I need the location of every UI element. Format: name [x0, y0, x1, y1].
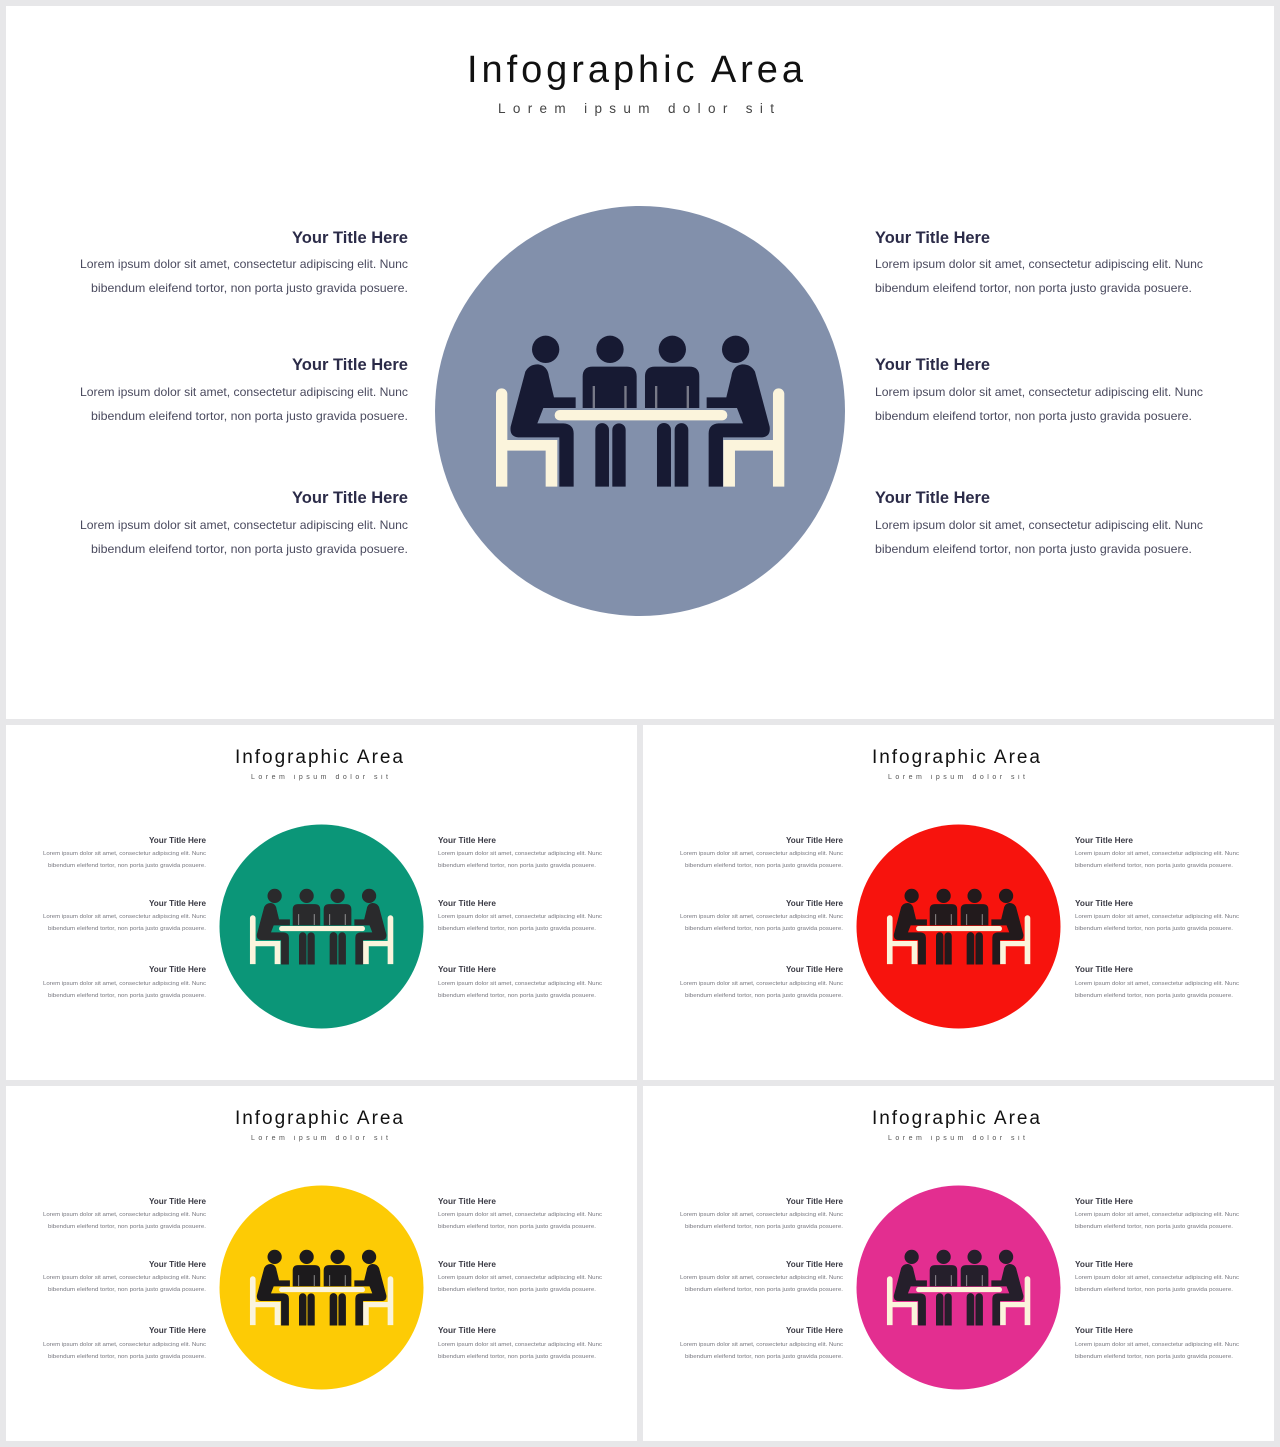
green circle — [220, 824, 424, 1028]
text block: left 3: Lorem ipsum dolor sit amet, consectetur adipiscing elit. Nunc — [80, 518, 408, 532]
text block: right column: bibendum eleifend tortor, non porta justo gravida posuere. — [1075, 1224, 1233, 1230]
text block: right column: Lorem ipsum dolor sit amet, consectetur adipiscing elit. Nunc — [1075, 1212, 1239, 1218]
main subtitle: Lorem ipsum dolor sit — [498, 101, 774, 116]
text block: left column: Your Title Here — [149, 965, 206, 974]
text block: left column: bibendum eleifend tortor, non porta justo gravida posuere. — [48, 1287, 206, 1293]
icon: four people meeting at table — [496, 336, 784, 487]
text block: right column: bibendum eleifend tortor, non porta justo gravida posuere. — [438, 863, 596, 869]
text block: right column: bibendum eleifend tortor, non porta justo gravida posuere. — [1075, 993, 1233, 999]
text block: right 1: Your Title Here — [875, 229, 990, 247]
text block: left 1: Your Title Here — [292, 229, 408, 247]
text block: left 2: Lorem ipsum dolor sit amet, consectetur adipiscing elit. Nunc — [80, 385, 408, 399]
text block: right column — [438, 1197, 602, 1360]
text block: right column: bibendum eleifend tortor, non porta justo gravida posuere. — [438, 1354, 596, 1360]
text block: left column: bibendum eleifend tortor, non porta justo gravida posuere. — [685, 1354, 843, 1360]
text block: left column — [43, 1197, 206, 1360]
text block: left column: Lorem ipsum dolor sit amet, consectetur adipiscing elit. Nunc — [680, 851, 843, 857]
text block: left column: bibendum eleifend tortor, non porta justo gravida posuere. — [48, 1354, 206, 1360]
text block: right column: Your Title Here — [1075, 899, 1133, 908]
text block: right column: Your Title Here — [438, 1326, 496, 1335]
text block: right column — [1075, 836, 1239, 999]
text block: right column: Lorem ipsum dolor sit amet, consectetur adipiscing elit. Nunc — [438, 851, 602, 857]
text block: right column: Your Title Here — [438, 1260, 496, 1269]
icon: meeting — [887, 889, 1030, 964]
text block: left column: Lorem ipsum dolor sit amet, consectetur adipiscing elit. Nunc — [43, 914, 206, 920]
panel: yellow variant — [6, 1086, 637, 1441]
text block: right column — [438, 836, 602, 999]
text block: left column: bibendum eleifend tortor, non porta justo gravida posuere. — [685, 993, 843, 999]
text block: left column: Your Title Here — [786, 1326, 843, 1335]
text block: left column: Lorem ipsum dolor sit amet, consectetur adipiscing elit. Nunc — [680, 1275, 843, 1281]
text block: left column — [43, 836, 206, 999]
icon: meeting — [250, 889, 393, 964]
text block: right column: Lorem ipsum dolor sit amet, consectetur adipiscing elit. Nunc — [438, 1275, 602, 1281]
panel: pink variant — [643, 1086, 1274, 1441]
title: Infographic Area — [235, 747, 403, 768]
icon: meeting — [887, 1250, 1030, 1325]
subtitle: Lorem ipsum dolor sit — [251, 1135, 388, 1142]
text block: left column: Lorem ipsum dolor sit amet, consectetur adipiscing elit. Nunc — [43, 1275, 206, 1281]
text block: left column: Your Title Here — [786, 1260, 843, 1269]
slate circle — [435, 206, 845, 616]
text block: left column: Your Title Here — [786, 1197, 843, 1206]
text block: left column: bibendum eleifend tortor, non porta justo gravida posuere. — [685, 1224, 843, 1230]
title: Infographic Area — [235, 1108, 403, 1129]
text block: left column: bibendum eleifend tortor, non porta justo gravida posuere. — [48, 1224, 206, 1230]
text block: right column: Lorem ipsum dolor sit amet, consectetur adipiscing elit. Nunc — [438, 981, 602, 987]
icon: meeting — [250, 1250, 393, 1325]
text block: right column: bibendum eleifend tortor, non porta justo gravida posuere. — [1075, 863, 1233, 869]
text block: right column: Your Title Here — [438, 965, 496, 974]
text block: right 1: Lorem ipsum dolor sit amet, consectetur adipiscing elit. Nunc — [875, 257, 1203, 271]
text block: left column: bibendum eleifend tortor, non porta justo gravida posuere. — [48, 993, 206, 999]
subtitle: Lorem ipsum dolor sit — [888, 1135, 1025, 1142]
text block: right column: Lorem ipsum dolor sit amet, consectetur adipiscing elit. Nunc — [438, 914, 602, 920]
text block: left 2 — [80, 356, 408, 423]
text block: right column: bibendum eleifend tortor, non porta justo gravida posuere. — [438, 1224, 596, 1230]
text block: left 1 — [80, 229, 408, 295]
text block: left column: bibendum eleifend tortor, non porta justo gravida posuere. — [685, 863, 843, 869]
text block: right 3: bibendum eleifend tortor, non porta justo gravida posuere. — [875, 542, 1192, 556]
text block: left column: Your Title Here — [149, 1197, 206, 1206]
text block: left column: Your Title Here — [786, 899, 843, 908]
panel: main slate infographic — [6, 6, 1274, 719]
text block: right column: Lorem ipsum dolor sit amet, consectetur adipiscing elit. Nunc — [1075, 914, 1239, 920]
text block: left 3: Your Title Here — [292, 489, 408, 507]
text block: left column: bibendum eleifend tortor, non porta justo gravida posuere. — [48, 863, 206, 869]
panel: green variant — [6, 725, 637, 1080]
text block: right column: Lorem ipsum dolor sit amet, consectetur adipiscing elit. Nunc — [1075, 1342, 1239, 1348]
text block: right 2: bibendum eleifend tortor, non porta justo gravida posuere. — [875, 409, 1192, 423]
text block: right column: Lorem ipsum dolor sit amet, consectetur adipiscing elit. Nunc — [1075, 981, 1239, 987]
subtitle: Lorem ipsum dolor sit — [888, 774, 1025, 781]
text block: left 1: bibendum eleifend tortor, non porta justo gravida posuere. — [91, 281, 408, 295]
title: Infographic Area — [872, 1108, 1040, 1129]
text block: right column: bibendum eleifend tortor, non porta justo gravida posuere. — [1075, 1287, 1233, 1293]
text block: left column: Lorem ipsum dolor sit amet, consectetur adipiscing elit. Nunc — [680, 914, 843, 920]
text block: right 3: Lorem ipsum dolor sit amet, consectetur adipiscing elit. Nunc — [875, 518, 1203, 532]
text block: right 2: Lorem ipsum dolor sit amet, consectetur adipiscing elit. Nunc — [875, 385, 1203, 399]
text block: left 2: Your Title Here — [292, 356, 408, 374]
text block: left column: Your Title Here — [149, 1260, 206, 1269]
text block: right column: bibendum eleifend tortor, non porta justo gravida posuere. — [438, 926, 596, 932]
text block: right column: bibendum eleifend tortor, non porta justo gravida posuere. — [1075, 1354, 1233, 1360]
text block: right column: Your Title Here — [1075, 836, 1133, 845]
text block: left 2: bibendum eleifend tortor, non porta justo gravida posuere. — [91, 409, 408, 423]
text block: right 1: bibendum eleifend tortor, non porta justo gravida posuere. — [875, 281, 1192, 295]
text block: left column: bibendum eleifend tortor, non porta justo gravida posuere. — [685, 926, 843, 932]
text block: right column — [1075, 1197, 1239, 1360]
text block: right 3 — [875, 489, 1203, 556]
text block: left column: Lorem ipsum dolor sit amet, consectetur adipiscing elit. Nunc — [680, 981, 843, 987]
subtitle: Lorem ipsum dolor sit — [251, 774, 388, 781]
text block: left 3: bibendum eleifend tortor, non porta justo gravida posuere. — [91, 542, 408, 556]
text block: left column — [680, 836, 843, 999]
text block: right column: Lorem ipsum dolor sit amet, consectetur adipiscing elit. Nunc — [1075, 1275, 1239, 1281]
text block: left column: Lorem ipsum dolor sit amet, consectetur adipiscing elit. Nunc — [43, 981, 206, 987]
text block: left column: Lorem ipsum dolor sit amet, consectetur adipiscing elit. Nunc — [680, 1342, 843, 1348]
yellow circle — [220, 1186, 424, 1390]
text block: right 3: Your Title Here — [875, 489, 990, 507]
text block: left column — [680, 1197, 843, 1360]
text block: right column: Your Title Here — [438, 836, 496, 845]
text block: left 3 — [80, 489, 408, 556]
text block: right column: Lorem ipsum dolor sit amet, consectetur adipiscing elit. Nunc — [438, 1342, 602, 1348]
text block: right column: Lorem ipsum dolor sit amet, consectetur adipiscing elit. Nunc — [1075, 851, 1239, 857]
text block: left column: Lorem ipsum dolor sit amet, consectetur adipiscing elit. Nunc — [43, 1342, 206, 1348]
panel: red variant — [643, 725, 1274, 1080]
main title: Infographic Area — [467, 49, 804, 91]
text block: left column: Your Title Here — [149, 836, 206, 845]
text block: right column: Your Title Here — [1075, 1260, 1133, 1269]
text block: right column: Your Title Here — [438, 1197, 496, 1206]
text block: right column: Your Title Here — [1075, 1326, 1133, 1335]
text block: left column: Lorem ipsum dolor sit amet, consectetur adipiscing elit. Nunc — [680, 1212, 843, 1218]
title: Infographic Area — [872, 747, 1040, 768]
text block: right column: bibendum eleifend tortor, non porta justo gravida posuere. — [438, 993, 596, 999]
text block: right 1 — [875, 229, 1203, 295]
text block: right column: Your Title Here — [438, 899, 496, 908]
text block: right column: Your Title Here — [1075, 1197, 1133, 1206]
pink circle — [856, 1186, 1060, 1390]
red circle — [856, 824, 1060, 1028]
text block: left column: Your Title Here — [786, 836, 843, 845]
text block: left column: Your Title Here — [149, 899, 206, 908]
text block: left column: Your Title Here — [149, 1326, 206, 1335]
text block: right column: bibendum eleifend tortor, non porta justo gravida posuere. — [438, 1287, 596, 1293]
text block: right 2: Your Title Here — [875, 356, 990, 374]
text block: right column: Lorem ipsum dolor sit amet, consectetur adipiscing elit. Nunc — [438, 1212, 602, 1218]
text block: left column: Your Title Here — [786, 965, 843, 974]
text block: right column: bibendum eleifend tortor, non porta justo gravida posuere. — [1075, 926, 1233, 932]
text block: left column: bibendum eleifend tortor, non porta justo gravida posuere. — [48, 926, 206, 932]
text block: left column: Lorem ipsum dolor sit amet, consectetur adipiscing elit. Nunc — [43, 1212, 206, 1218]
text block: left column: bibendum eleifend tortor, non porta justo gravida posuere. — [685, 1287, 843, 1293]
text block: right 2 — [875, 356, 1203, 423]
text block: left 1: Lorem ipsum dolor sit amet, consectetur adipiscing elit. Nunc — [80, 257, 408, 271]
text block: left column: Lorem ipsum dolor sit amet, consectetur adipiscing elit. Nunc — [43, 851, 206, 857]
text block: right column: Your Title Here — [1075, 965, 1133, 974]
